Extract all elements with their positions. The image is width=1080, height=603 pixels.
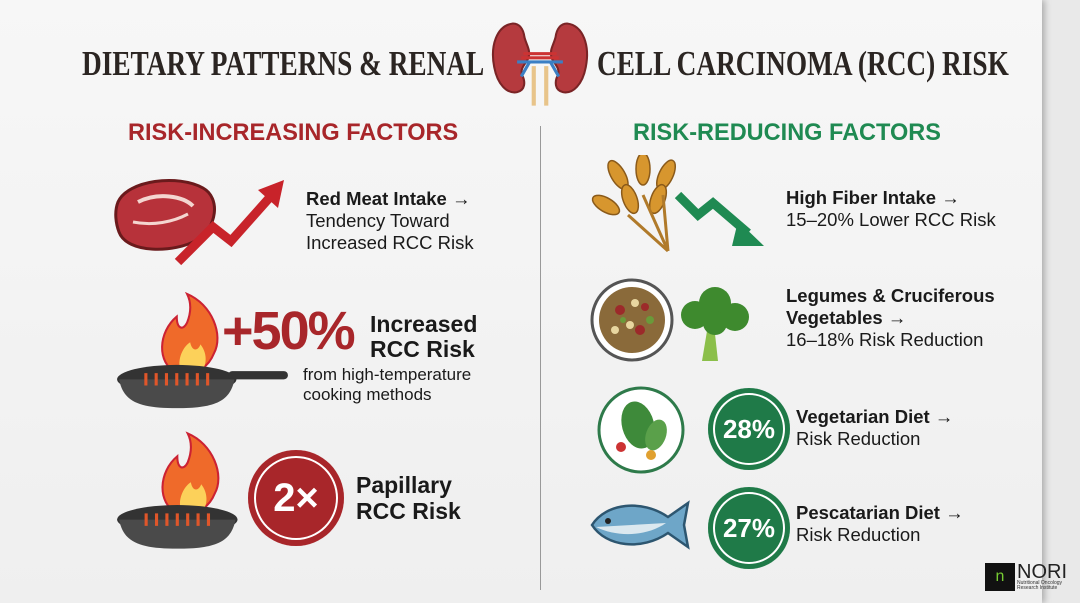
- text: vegetarian: [796, 406, 953, 449]
- logo: NORI: NORI: [1017, 561, 1067, 583]
- text: pescatarian: Pescatarian Diet →: [796, 502, 964, 523]
- icon: legumes bowl and broccoli: [590, 278, 749, 362]
- logo: NORI: Research Institute: [1017, 585, 1057, 591]
- panel: risk-increasing: RCC Risk: [370, 336, 475, 362]
- stat: +50%: +50%: [222, 301, 354, 361]
- icon: fish: [590, 500, 690, 550]
- badge: 27%: [708, 487, 790, 569]
- text: red meat: Increased RCC Risk: [306, 232, 474, 253]
- text: legumes: [786, 285, 995, 350]
- badge: 2x: [248, 450, 344, 546]
- badge: 2x: 2×: [273, 476, 319, 520]
- text: legumes: Vegetables →: [786, 307, 906, 328]
- panel: risk-reducing: [590, 155, 996, 569]
- text: red meat: Tendency Toward: [306, 210, 450, 231]
- icon: steak with rising arrow: [114, 179, 284, 266]
- text: red meat: [306, 188, 474, 253]
- title: DIETARY PATTERNS & RENAL: [82, 44, 484, 83]
- text: vegetarian: Risk Reduction: [796, 428, 920, 449]
- text: fiber: High Fiber Intake →: [786, 187, 960, 208]
- text: fiber: 15–20% Lower RCC Risk: [786, 209, 996, 230]
- icon: flaming grill pan: [117, 431, 238, 549]
- text: pescatarian: [796, 502, 964, 545]
- text: pescatarian: Risk Reduction: [796, 524, 920, 545]
- text: fiber: [786, 187, 996, 230]
- title: CELL CARCINOMA (RCC) RISK: [597, 44, 1009, 83]
- logo: NORI: Nutritional Oncology: [1017, 580, 1062, 586]
- badge: 28%: 28%: [723, 414, 775, 444]
- heading: risk-increasing: RISK-INCREASING FACTORS: [128, 119, 458, 146]
- text: papillary: Papillary: [356, 472, 452, 498]
- badge: 28%: [708, 388, 790, 470]
- heading: risk-reducing: RISK-REDUCING FACTORS: [633, 119, 941, 146]
- icon: wheat with down arrow: [592, 155, 764, 252]
- text: red meat: Red Meat Intake →: [306, 188, 470, 209]
- icon: flaming pan: [117, 292, 288, 408]
- text: papillary: [356, 472, 461, 524]
- panel: risk-increasing: cooking methods: [303, 385, 432, 404]
- text: legumes: 16–18% Risk Reduction: [786, 329, 983, 350]
- panel: risk-increasing: Increased: [370, 311, 477, 337]
- text: vegetarian: Vegetarian Diet →: [796, 406, 953, 427]
- text: legumes: Legumes & Cruciferous: [786, 285, 995, 306]
- logo: NORI: [985, 561, 1067, 591]
- text: papillary: RCC Risk: [356, 498, 461, 524]
- icon: kidneys: [492, 22, 588, 106]
- icon: vegetable plate: [598, 386, 684, 474]
- badge: 27%: 27%: [723, 512, 775, 542]
- panel: risk-increasing: from high-temperature: [303, 365, 471, 384]
- title: [82, 44, 1009, 83]
- panel: risk-increasing: [114, 179, 477, 549]
- logo: NORI: n: [996, 568, 1004, 585]
